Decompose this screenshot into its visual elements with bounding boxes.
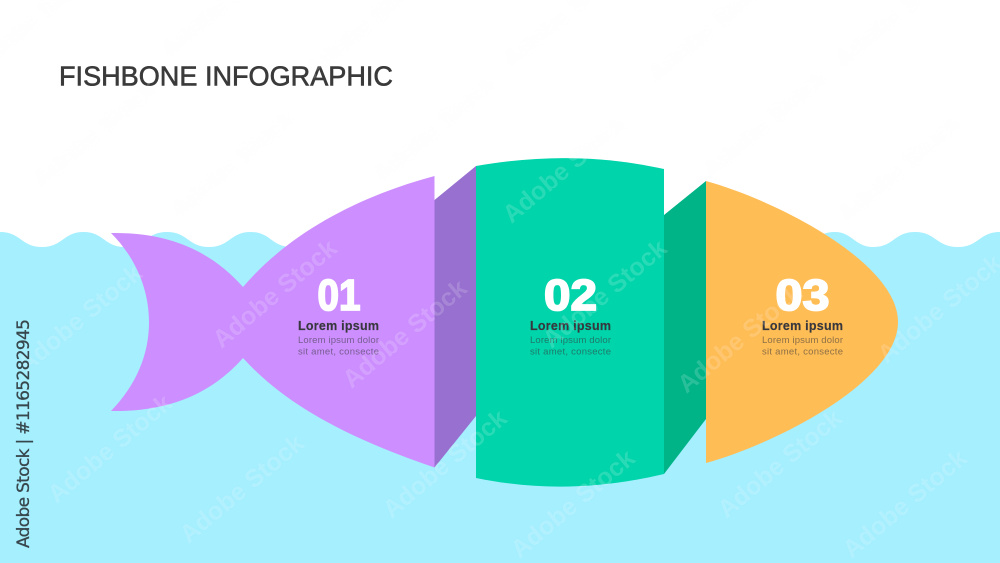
text: Adobe Stock: [42, 389, 177, 509]
text: Adobe Stock: [207, 234, 342, 354]
title: FISHBONE INFOGRAPHIC: [59, 60, 393, 92]
number 03: 03: [776, 271, 830, 320]
text: Adobe Stock: [174, 429, 309, 549]
text: Adobe Stock: [537, 234, 672, 354]
vertical stock credit: Adobe Stock | #1165282945: [14, 319, 34, 548]
text: Adobe Stock: [337, 274, 472, 394]
description 03: Lorem ipsum dolor: [762, 335, 843, 346]
heading 02: Lorem ipsum: [530, 319, 611, 333]
text: Adobe Stock: [367, 69, 502, 189]
text: Adobe Stock: [672, 279, 807, 399]
description 03: sit amet, consecte: [762, 346, 843, 358]
water with wavy surface: [0, 232, 1000, 563]
text: Adobe Stock: [12, 259, 147, 379]
number 02: 02: [544, 271, 597, 320]
text: Adobe Stock: [697, 64, 832, 184]
block 03 text: [762, 271, 843, 358]
block 01 text: [298, 271, 379, 358]
fold: dark green: [664, 181, 706, 474]
fold: dark purple: [434, 166, 476, 468]
head section: orange: [706, 181, 898, 463]
fish illustration: [111, 158, 898, 487]
fish tail and body section: purple: [111, 176, 434, 468]
text: Adobe Stock: [832, 109, 967, 229]
description 01: sit amet, consecte: [298, 346, 379, 358]
middle section: green: [476, 158, 664, 487]
description 01: Lorem ipsum dolor: [298, 335, 379, 346]
description 02: Lorem ipsum dolor: [530, 335, 611, 346]
heading 01: Lorem ipsum: [298, 319, 379, 333]
text: Adobe Stock: [712, 404, 847, 524]
text: Adobe Stock: [377, 404, 512, 524]
text: Adobe Stock: [505, 444, 640, 563]
block 02 text: [530, 271, 611, 358]
heading 03: Lorem ipsum: [762, 319, 843, 333]
text: Adobe Stock: [27, 74, 162, 194]
description 02: sit amet, consecte: [530, 346, 611, 358]
text: Adobe Stock: [165, 104, 300, 224]
text: Adobe Stock: [837, 444, 972, 563]
text: Adobe Stock: [497, 109, 632, 229]
number 01: 01: [318, 271, 360, 320]
